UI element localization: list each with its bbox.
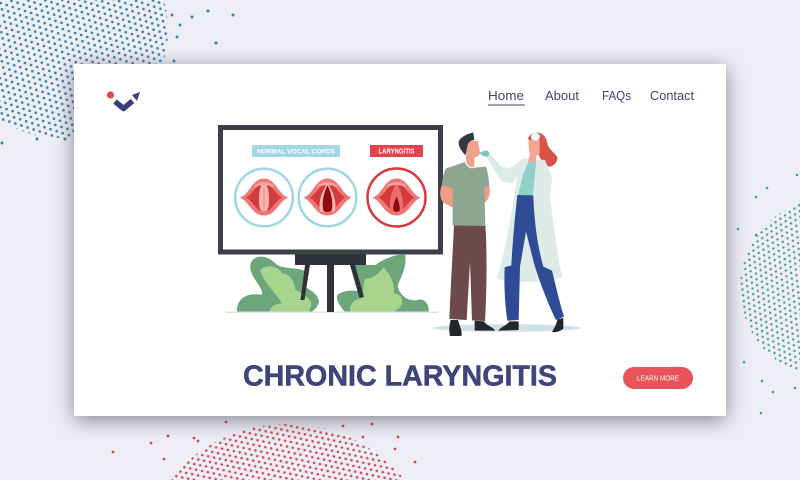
- button: learn more: [623, 367, 693, 389]
- patient head and neck: [465, 141, 480, 167]
- throat swab: [479, 150, 489, 157]
- button: learn more: LEARN MORE: [637, 376, 679, 382]
- label: normal vocal cords: NORMAL VOCAL CORDS: [257, 148, 335, 155]
- icon: logo: [107, 91, 140, 108]
- label: normal vocal cords: [252, 145, 340, 157]
- patient arms: [440, 185, 490, 208]
- navigation: Contact: [650, 89, 695, 103]
- ground line: [226, 312, 438, 313]
- character: patient: [440, 132, 495, 336]
- diagram: laryngitis cords: [368, 168, 426, 226]
- dotted blob: red: [112, 421, 416, 480]
- doctor shoes: [498, 318, 563, 332]
- diagram: normal open cords: [299, 169, 356, 226]
- floor shadow: [433, 324, 581, 332]
- presentation board stand: [295, 252, 366, 312]
- doctor shirt: [518, 160, 536, 195]
- doctor trousers: [504, 195, 564, 321]
- label: laryngitis: [370, 145, 423, 157]
- navigation: [488, 89, 695, 106]
- patient hair: [459, 132, 474, 155]
- label: laryngitis: LARYNGITIS: [378, 148, 415, 156]
- dotted blob: blue: [0, 0, 234, 144]
- head mirror: [531, 133, 540, 141]
- navigation: About: [545, 89, 580, 103]
- presentation board: [220, 128, 440, 252]
- landing page card: [74, 64, 726, 416]
- dotted blob: green: [737, 174, 800, 414]
- plants: [237, 255, 429, 312]
- diagram: normal closed cords: [235, 169, 293, 226]
- patient shirt: [442, 162, 489, 226]
- patient trousers: [449, 225, 487, 321]
- doctor coat: [486, 153, 562, 282]
- character: doctor: [479, 132, 564, 332]
- patient shoes: [449, 320, 495, 336]
- doctor neck and face: [528, 140, 540, 162]
- navigation: Home: [488, 89, 524, 103]
- patient collar: [465, 162, 477, 168]
- title: CHRONIC LARYNGITIS: [243, 360, 557, 392]
- navigation: FAQs: [602, 89, 631, 103]
- doctor hair: [528, 132, 557, 167]
